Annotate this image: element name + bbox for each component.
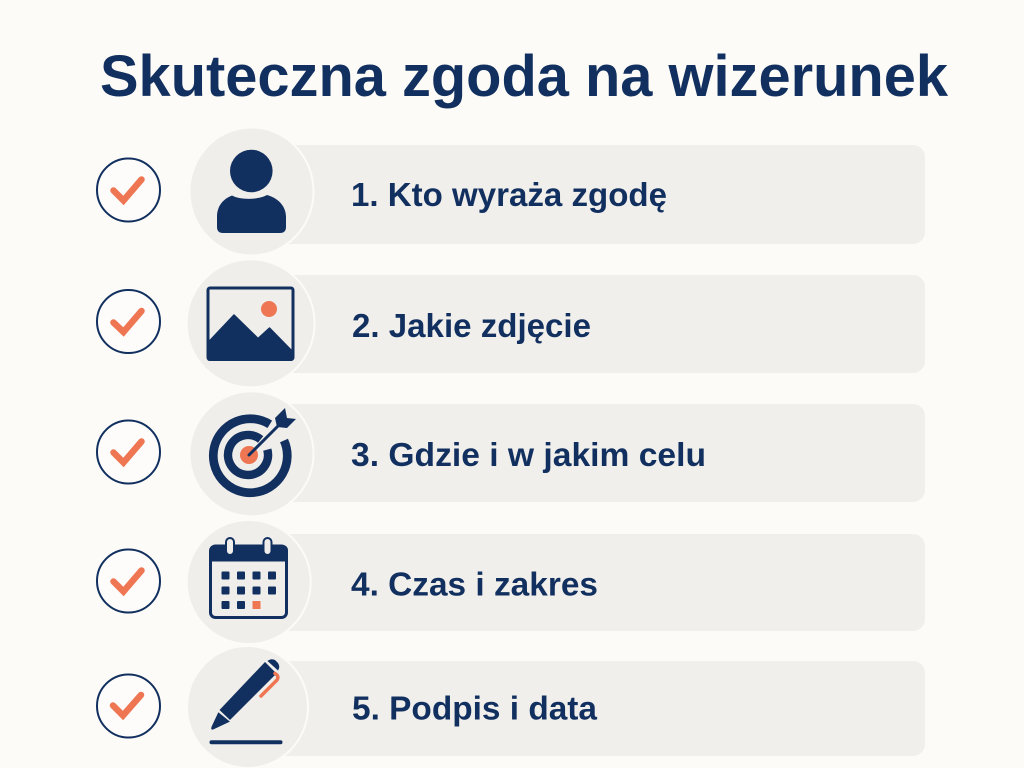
row 5 icon: pen: [187, 646, 308, 768]
row 4 icon: calendar: [187, 520, 311, 644]
row 5 label: 5. Podpis i data: [352, 690, 598, 726]
row 3 icon: target: [190, 391, 314, 516]
row 2 check badge: [97, 290, 160, 353]
row 3 check badge: [97, 420, 160, 484]
row 4 label: 4. Czas i zakres: [351, 566, 598, 602]
row 2: which photo: [97, 259, 925, 387]
row 4 check badge: [97, 550, 160, 612]
row 5: signature and date: [97, 646, 925, 768]
row 1 icon: person: [190, 128, 314, 256]
row 3 bar: [270, 404, 925, 502]
row 4: time and scope: [97, 520, 925, 644]
row 2 bar: [270, 275, 925, 373]
row 1 label: 1. Kto wyraża zgodę: [351, 176, 667, 213]
row 3 label: 3. Gdzie i w jakim celu: [351, 436, 706, 473]
row 3: where and for what purpose: [97, 391, 925, 516]
row 1: who consents: [97, 128, 925, 256]
row 4 bar: [270, 534, 925, 631]
row 5 check badge: [97, 674, 160, 738]
row 1 bar: [270, 145, 925, 244]
row 5 bar: [270, 661, 925, 756]
row 2 label: 2. Jakie zdjęcie: [352, 307, 591, 344]
row 2 icon: picture: [187, 259, 315, 387]
title: Skuteczna zgoda na wizerunek: [100, 44, 949, 109]
row 1 check badge: [97, 158, 160, 222]
